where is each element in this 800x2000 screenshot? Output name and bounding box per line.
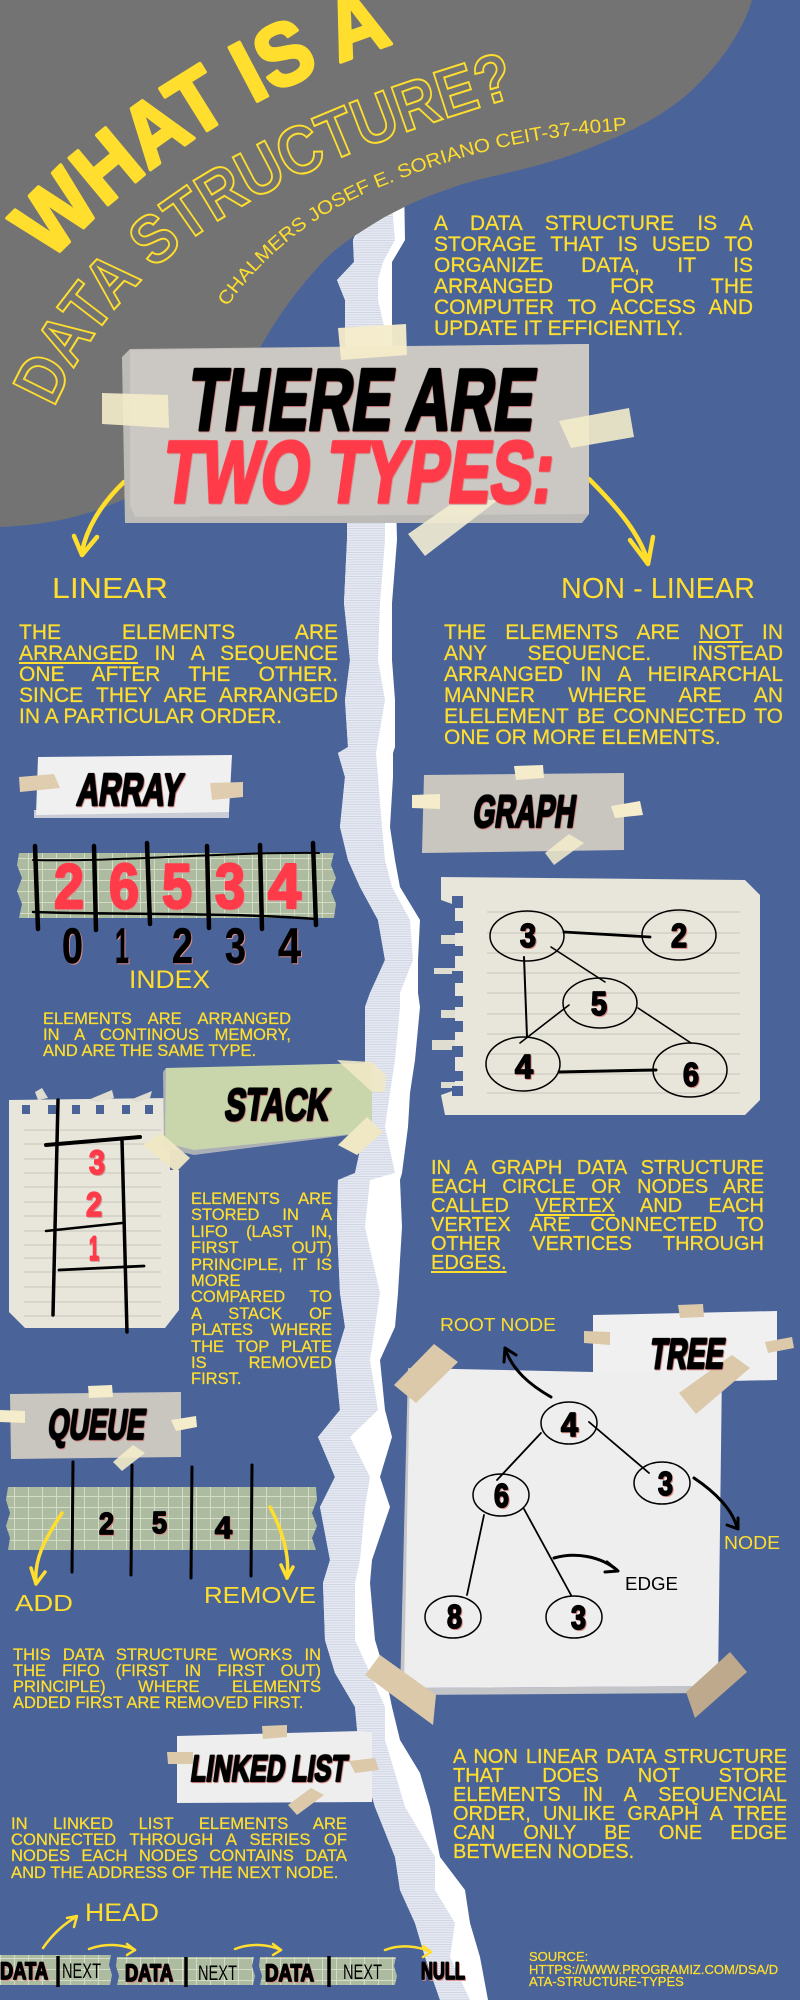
panel: stack notebook <box>9 1088 179 1332</box>
text: queue description: PRINCIPLE) WHERE ELEMENTS <box>13 1678 321 1696</box>
array values: 3 <box>215 852 245 922</box>
tree node numbers: 8 <box>447 1598 462 1635</box>
arrow: root node <box>504 1348 551 1397</box>
label: non-linear: NON - LINEAR <box>561 573 755 605</box>
node strip 3 <box>259 1957 397 1985</box>
graph vertex numbers: 3 <box>520 917 536 954</box>
text: stack description: MORE <box>191 1272 240 1290</box>
text: intro paragraph: STORAGE THAT IS USED TO <box>434 233 753 256</box>
panel: graph title <box>412 765 643 865</box>
text: graph description: VERTEX ARE CONNECTED TO <box>431 1214 764 1236</box>
heading: graph: GRAPH <box>470 786 580 837</box>
next labels: NEXT <box>62 1960 101 1983</box>
node strip 1 <box>0 1955 112 1985</box>
heading: array: ARRAY <box>74 764 187 815</box>
panel: array title <box>19 755 243 818</box>
text: source <box>528 1949 778 1989</box>
text: graph description: EACH CIRCLE OR NODES ARE <box>431 1176 764 1198</box>
array values: 6 <box>109 852 139 922</box>
torn paper strip <box>318 180 488 2000</box>
queue lines <box>72 1462 252 1578</box>
tape: top <box>338 324 407 360</box>
text: stack description: FIRST OUT) <box>191 1239 332 1257</box>
arrow: head <box>43 1916 77 1948</box>
arrow: edge pointer <box>554 1555 618 1572</box>
text: source: SOURCE: <box>529 1949 588 1964</box>
tape: right <box>210 782 243 800</box>
tape: left <box>412 794 440 809</box>
text: stack description: ELEMENTS ARE <box>191 1190 332 1208</box>
tape: left <box>584 1331 610 1345</box>
text: tree description: A NON LINEAR DATA STRUCTURE <box>453 1746 787 1768</box>
text: stack description: PLATES WHERE <box>191 1321 332 1339</box>
panel: main heading sign <box>102 324 634 556</box>
text: non-linear description <box>444 621 783 749</box>
index digits: 3 <box>225 918 246 974</box>
queue values: 5 <box>152 1505 167 1540</box>
text: source: ATA-STRUCTURE-TYPES <box>529 1974 684 1989</box>
stack values: 3 <box>89 1144 105 1182</box>
label: root node: ROOT NODE <box>440 1315 556 1335</box>
text: stack description: A STACK OF <box>191 1305 332 1323</box>
text: graph description <box>431 1157 764 1274</box>
index digits: 1 <box>115 918 129 974</box>
text: intro paragraph: ORGANIZE DATA, IT IS <box>434 254 753 277</box>
text: queue description: ADDED FIRST ARE REMOVED FIRST. <box>13 1694 303 1712</box>
tape: top <box>678 1304 704 1318</box>
heading: linked list: LINKED LIST <box>189 1747 351 1789</box>
stack values: 1 <box>89 1230 99 1268</box>
tape: top <box>88 1385 113 1398</box>
notebook holes <box>452 896 463 1096</box>
tree node numbers <box>447 1406 673 1636</box>
arrow: to non-linear <box>589 479 653 564</box>
text: linked list description <box>10 1814 347 1882</box>
heading: there are: THERE ARE <box>183 351 543 449</box>
arrows: next pointers <box>89 1944 431 1957</box>
panel: stack title <box>143 1060 386 1172</box>
text: stack description: LIFO (LAST IN, <box>191 1223 332 1241</box>
graph vertex numbers: 4 <box>515 1048 534 1085</box>
text: linked list description: NODES EACH NODES CONTAINS DATA <box>11 1846 347 1865</box>
array values <box>54 852 301 922</box>
chart: linked list nodes <box>0 1955 465 1987</box>
data labels: DATA <box>0 1958 48 1985</box>
tape: top <box>262 1725 287 1739</box>
ruled lines <box>24 1130 161 1316</box>
tape: bottom <box>113 1445 145 1471</box>
label: remove: REMOVE <box>204 1582 316 1608</box>
arrow: add <box>31 1513 62 1584</box>
text: linear description: ONE AFTER THE OTHER. <box>19 663 338 686</box>
panel: tree paper <box>365 1330 750 1725</box>
chart: queue cells <box>6 1462 317 1578</box>
tree nodes <box>425 1402 690 1638</box>
text: tree description: ELEMENTS IN A SEQUENCIAL <box>453 1784 787 1806</box>
text: linear description: ARRANGED IN A SEQUENCE <box>19 642 338 665</box>
text: linear description <box>18 621 338 728</box>
label: linear: LINEAR <box>52 573 168 605</box>
graph vertex numbers: 2 <box>671 917 687 954</box>
index digits: 4 <box>278 918 301 974</box>
index digits: 2 <box>172 918 193 974</box>
tape: right <box>765 1337 794 1353</box>
text: non-linear description: ANY SEQUENCE. INSTEAD <box>444 642 783 665</box>
heading: two types: TWO TYPES: <box>158 423 561 521</box>
queue values <box>99 1505 233 1545</box>
data labels <box>0 1958 314 1987</box>
tree node numbers: 6 <box>494 1477 509 1514</box>
text: intro paragraph: ARRANGED FOR THE <box>434 275 753 298</box>
stack drawing <box>46 1100 144 1332</box>
array values: 5 <box>162 852 192 922</box>
index digits <box>62 918 301 974</box>
text: graph description: EDGES. <box>431 1252 507 1274</box>
text: source: HTTPS://WWW.PROGRAMIZ.COM/DSA/D <box>529 1962 778 1976</box>
tape: left <box>167 1752 193 1764</box>
arrow: remove <box>270 1507 293 1578</box>
text: non-linear description: ONE OR MORE ELEMENTS. <box>444 726 721 749</box>
text: non-linear description: MANNER WHERE ARE AN <box>444 684 783 707</box>
arrow: node <box>694 1478 738 1529</box>
panel: linked list title <box>167 1725 379 1815</box>
graph vertex numbers <box>515 917 699 1093</box>
text: graph description: OTHER VERTICES THROUGH <box>431 1233 764 1255</box>
label: node: NODE <box>724 1533 780 1553</box>
tree node numbers: 4 <box>561 1406 579 1443</box>
text: tree description <box>452 1746 787 1863</box>
next labels <box>62 1960 382 1985</box>
text: stack description: PRINCIPLE, IT IS <box>191 1256 332 1274</box>
text: stack description: THE TOP PLATE <box>191 1338 332 1356</box>
tape: left <box>102 393 169 428</box>
author line: CHALMERS JOSEF E. SORIANO CEIT-37-401P <box>219 118 626 304</box>
label: index: INDEX <box>129 966 210 994</box>
graph edges <box>520 932 691 1072</box>
tape: left <box>0 1410 25 1423</box>
text: non-linear description: THE ELEMENTS ARE NOT IN <box>444 621 783 644</box>
panel: queue title <box>0 1385 197 1471</box>
tree node numbers: 3 <box>571 1599 586 1636</box>
dividers <box>58 1956 329 1987</box>
text: queue description: THE FIFO (FIRST IN FIRST OUT) <box>13 1662 321 1680</box>
tree node numbers: 3 <box>658 1465 673 1502</box>
title: DATA STRUCTURE?: DATA STRUCTURE? <box>12 54 506 406</box>
tape: top <box>514 765 544 780</box>
text: stack description <box>190 1190 332 1388</box>
text: graph description: CALLED VERTEX AND EACH <box>431 1195 764 1217</box>
text: non-linear description: ARRANGED IN A HEIRARCHAL <box>444 663 783 686</box>
tape: right <box>611 801 643 818</box>
text: array description <box>42 1010 291 1060</box>
label: head: HEAD <box>85 1899 159 1927</box>
tape: right <box>559 408 634 448</box>
next labels: NEXT <box>343 1961 382 1984</box>
text: linear description: THE ELEMENTS ARE <box>19 621 338 644</box>
data labels: DATA <box>265 1960 314 1987</box>
arrow: to linear <box>74 482 124 555</box>
heading: queue: QUEUE <box>46 1401 149 1448</box>
graph vertex numbers: 5 <box>591 985 607 1022</box>
text: linear description: IN A PARTICULAR ORDER. <box>19 705 282 728</box>
text: intro paragraph: UPDATE IT EFFICIENTLY. <box>434 317 683 340</box>
heading: stack: STACK <box>222 1079 334 1130</box>
next labels: NEXT <box>198 1962 237 1985</box>
text: intro paragraph: COMPUTER TO ACCESS AND <box>434 296 753 319</box>
text: stack description: IS REMOVED <box>191 1354 332 1372</box>
text: stack description: FIRST. <box>191 1370 241 1388</box>
text: tree description: THAT DOES NOT STORE <box>453 1765 787 1787</box>
array values: 2 <box>54 852 84 922</box>
queue values: 2 <box>99 1506 114 1541</box>
text: array description: AND ARE THE SAME TYPE. <box>43 1042 256 1060</box>
text: queue description <box>12 1646 321 1712</box>
tape: left <box>143 1133 190 1172</box>
label: edge: EDGE <box>625 1574 678 1594</box>
paper tears <box>35 1088 152 1102</box>
chart: array cells <box>17 843 336 930</box>
tape: bottom right <box>338 1117 383 1155</box>
text: array description: IN A CONTINOUS MEMORY, <box>43 1026 291 1044</box>
tape: top left <box>394 1344 458 1403</box>
text: stack description: COMPARED TO <box>191 1288 332 1306</box>
stack values <box>86 1144 105 1268</box>
graph vertex numbers: 6 <box>683 1056 699 1093</box>
tape: right <box>171 1416 197 1431</box>
null label: NULL <box>421 1958 465 1985</box>
tape: bottom right <box>686 1652 747 1718</box>
text: graph description: IN A GRAPH DATA STRUCTURE <box>431 1157 764 1179</box>
tape: bottom <box>545 834 584 865</box>
text: tree description: ORDER, UNLIKE GRAPH A TREE <box>453 1803 787 1825</box>
graph vertices <box>486 910 727 1097</box>
tape: right <box>349 1758 379 1773</box>
array grid lines <box>33 843 319 930</box>
text: array description: ELEMENTS ARE ARRANGED <box>43 1010 291 1028</box>
stack values: 2 <box>86 1186 102 1224</box>
text: queue description: THIS DATA STRUCTURE WORKS IN <box>13 1646 321 1664</box>
panel: tree title <box>584 1304 794 1384</box>
text: non-linear description: ELELEMENT BE CONNECTED TO <box>444 705 783 728</box>
heading: tree: TREE <box>647 1330 728 1377</box>
text: linear description: SINCE THEY ARE ARRANGED <box>19 684 338 707</box>
text: linked list description: AND THE ADDRESS OF THE NEXT NODE. <box>11 1863 338 1882</box>
ruled lines <box>487 912 740 1093</box>
text: intro paragraph: A DATA STRUCTURE IS A <box>434 212 753 235</box>
text: linked list description: CONNECTED THROUGH A SERIES OF <box>11 1830 347 1849</box>
grey header blob <box>0 0 752 527</box>
queue values: 4 <box>215 1510 233 1545</box>
text: linked list description: IN LINKED LIST ELEMENTS ARE <box>11 1814 347 1833</box>
text: intro paragraph <box>434 212 754 340</box>
label: add: ADD <box>15 1590 73 1616</box>
tape: top right <box>337 1060 386 1092</box>
text: tree description: CAN ONLY BE ONE EDGE <box>453 1822 787 1844</box>
node strip 2 <box>116 1957 255 1985</box>
text: stack description: STORED IN A <box>191 1206 332 1224</box>
notebook holes <box>22 1105 153 1114</box>
array values: 4 <box>268 852 301 922</box>
tape: top right <box>679 1355 750 1414</box>
panel: graph notebook <box>432 877 760 1115</box>
tree edges <box>467 1422 649 1595</box>
index digits: 0 <box>62 918 83 974</box>
notebook tabs <box>432 935 455 1088</box>
tape: bottom left <box>365 1655 436 1725</box>
data labels: DATA <box>125 1960 173 1987</box>
text: tree description: BETWEEN NODES. <box>453 1841 634 1863</box>
tape: left <box>19 774 60 792</box>
tape: bottom <box>288 1788 324 1815</box>
tape: bottom <box>408 500 498 556</box>
